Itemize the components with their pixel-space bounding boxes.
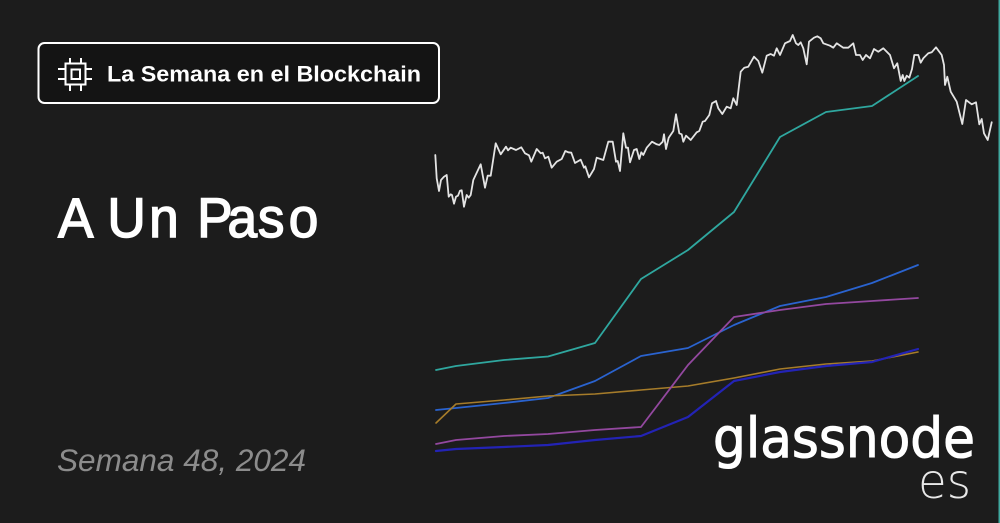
series: dark blue [436, 349, 918, 451]
series: purple [436, 298, 918, 444]
badge label: La Semana en el Blockchain [107, 62, 421, 86]
badge: La Semana en el Blockchain [38, 43, 439, 103]
price line [435, 35, 992, 207]
title: A Un Paso [58, 187, 318, 249]
date label: Semana 48, 2024 [57, 442, 306, 478]
icon: microchip [58, 58, 92, 91]
logo: glassnode es [713, 406, 975, 510]
series: blue [436, 265, 918, 410]
line chart [435, 35, 992, 451]
series: orange [436, 352, 918, 423]
series: teal [436, 76, 918, 370]
logo suffix: es [918, 454, 971, 510]
logo wordmark: glassnode [713, 406, 975, 470]
